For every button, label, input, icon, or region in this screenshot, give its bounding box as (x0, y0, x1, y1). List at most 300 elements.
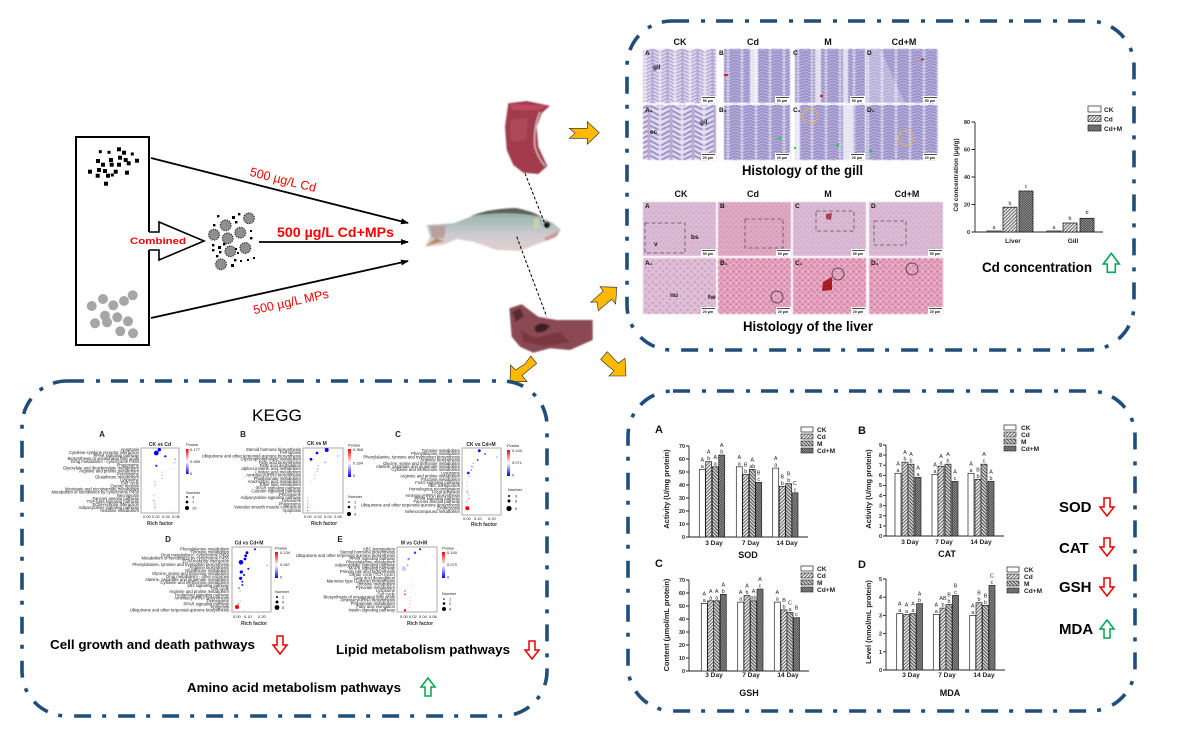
panel border (628, 391, 1135, 711)
dot plot D: Cd vs Cd+M: Cell cycle (211, 586, 230, 591)
dot plot E: M vs Cd+M: MAPK signaling pathway (349, 566, 396, 571)
bar chart B: CAT: b (946, 459, 950, 465)
icon: microplastic beads (87, 290, 138, 338)
bar chart C: GSH: a (776, 597, 779, 603)
dot plot C: CK vs Cd+M: 3 (515, 494, 518, 498)
dot plot C: CK vs Cd+M: 0.20 (488, 516, 497, 521)
micrographs: gill: A₁ (645, 107, 653, 114)
label: CAT: CAT (1059, 540, 1089, 557)
dot plot E: M vs Cd+M: ABC transporters (363, 546, 395, 552)
micrographs: gill: 20 μm (777, 156, 787, 160)
bar chart D: MDA: c (991, 580, 994, 586)
bar chart D: MDA: M (1024, 581, 1030, 588)
panel border (22, 381, 547, 716)
arrow: MPs to fish (151, 261, 408, 318)
dot plot C: CK vs Cd+M: 6 (515, 498, 518, 504)
bar chart C: GSH: 30 (679, 630, 685, 636)
bar chart B: CAT: 3 (879, 504, 882, 510)
dot plot E: M vs Cd+M: 0.04 (419, 614, 428, 619)
micrographs: gill: D₁ (867, 107, 875, 114)
dot plot C: CK vs Cd+M: Aminoacyl-tRNA biosynthesis (405, 493, 460, 498)
bar chart B: CAT: 5 (879, 483, 882, 489)
micrographs: gill: C₁ (793, 107, 801, 114)
dot plot C: CK vs Cd+M: Glycine, serine and threonine metabolism (383, 461, 461, 466)
bar chart C: GSH (655, 558, 836, 698)
bar chart: Cd concentration: Liver (1005, 238, 1021, 245)
dot plot B: CK vs M: 0.00 (304, 514, 313, 519)
bar chart B: CAT: c (954, 476, 957, 482)
micrographs: liver: 50 μm (778, 252, 788, 256)
dot plot D: Cd vs Cd+M: p53 signaling pathway (188, 583, 230, 588)
micrographs: gill: 50 μm (925, 99, 935, 103)
bar chart C: GSH: 10 (679, 656, 685, 662)
bar chart D: MDA: 3 Day (902, 672, 920, 679)
dot plot D: Cd vs Cd+M: Arginine and proline metabolism (169, 589, 230, 594)
dot plot B: CK vs M: Number (348, 494, 363, 499)
bar chart A: SOD: 50 (679, 470, 685, 476)
dot plot B: CK vs M: Vascular smooth muscle contraction (234, 505, 302, 510)
label: MDA: MDA (1059, 621, 1093, 638)
bar chart: Cd concentration: CK (1104, 107, 1114, 114)
dot plot B: CK vs M: 0 (353, 473, 356, 478)
panel: histology and Cd concentration (627, 21, 1134, 350)
bar chart A: SOD: B (744, 463, 748, 469)
bar chart: Cd concentration: Cd concentration (μg/g) (953, 138, 960, 212)
bar chart B: CAT: 7 Day (935, 539, 953, 546)
dot plot A: CK vs Cd: Pvalue (186, 442, 199, 447)
micrographs: liver: A₁ (645, 260, 653, 267)
micrographs: liver: C (795, 203, 800, 210)
dot plot C: CK vs Cd+M: Endocytosis (437, 506, 460, 511)
bar chart C: GSH: C (655, 558, 663, 570)
dot plot B: CK vs M: Steroid hormone biosynthesis (246, 447, 301, 452)
dot plot B: CK vs M: Aminoacyl-tRNA biosynthesis (246, 473, 301, 478)
label: 500 ug/L MPs: 500 µg/L MPs (252, 287, 330, 317)
dot plot E: M vs Cd+M: Adipocytokine signaling pathway (334, 562, 396, 568)
bar chart: Cd concentration (953, 106, 1123, 245)
dot plot C: CK vs Cd+M (361, 430, 523, 528)
dot plot D: Cd vs Cd+M: 0.00 (233, 614, 242, 619)
dot plot A: CK vs Cd: Phagosome (117, 462, 140, 467)
dot plot B: CK vs M: Fatty acid degradation (260, 463, 302, 468)
bar chart D: MDA: 3 (879, 614, 882, 620)
bar chart C: GSH: 40 (679, 617, 685, 623)
label: cell growth and death pathways: Cell growth and death pathways (50, 638, 255, 652)
dot plot A: CK vs Cd: Cell cycle (121, 481, 140, 486)
dot plot B: CK vs M: Phosphonate metabolism (254, 476, 302, 481)
dot plot A: CK vs Cd: Number (186, 490, 201, 495)
dot plot C: CK vs Cd+M: Pvalue (507, 443, 520, 448)
dot plot E: M vs Cd+M: Primary bile acid biosynthesis (340, 569, 395, 574)
bar chart C: GSH: M (817, 580, 823, 587)
dot plot E: M vs Cd+M: 0 (447, 574, 450, 580)
bar chart D: MDA: 4 (879, 595, 882, 601)
bar chart D: MDA: A (911, 602, 915, 608)
bar chart C: GSH: Cd+M (817, 587, 836, 594)
dot plot E: M vs Cd+M: Tyrosine metabolism (357, 582, 396, 587)
dot plot A: CK vs Cd: Glyoxylate and dicarboxylate metabolism (63, 465, 140, 470)
dot plot B: CK vs M: Rich factor (311, 521, 337, 527)
arrow: liver to KEGG (510, 356, 537, 382)
arrow: lipid down (525, 641, 539, 659)
dot plot D: Cd vs Cd+M: Cd vs Cd+M (235, 540, 263, 546)
dot plot E: M vs Cd+M: 0.070 (447, 562, 458, 567)
dot plot E: M vs Cd+M: Fatty acid degradation (354, 575, 396, 580)
dot plot C: CK vs Cd+M: Focal adhesion (432, 490, 461, 495)
bar chart C: GSH: 20 (679, 643, 685, 649)
bar chart A: SOD: c (794, 487, 797, 493)
label: combined: Combined (130, 236, 186, 247)
arrow: CAT down (1100, 538, 1114, 556)
bar chart C: GSH: 0 (682, 669, 685, 675)
bar chart B: CAT: M (1021, 439, 1027, 446)
bar chart C: GSH: A (745, 584, 749, 590)
bar chart D: MDA: Cd (1024, 574, 1033, 581)
bar chart D: MDA: A (905, 602, 908, 608)
micrographs: gill: 20 μm (703, 156, 713, 160)
dot plot A: CK vs Cd: Adipocytokine signaling pathway (78, 505, 140, 510)
bar chart C: GSH: 3 Day (705, 672, 723, 679)
dot plot A: CK vs Cd: Arginine and proline metabolism (79, 468, 140, 473)
bar chart D: MDA: Cd+M (1024, 588, 1043, 595)
heading: histology of the gill: Histology of the gill (742, 163, 863, 178)
bar chart A: SOD: b (707, 456, 710, 462)
dot plot E: M vs Cd+M: 0.02 (409, 614, 418, 619)
dot plot A: CK vs Cd: 0.177 (190, 447, 201, 452)
dot plot E: M vs Cd+M: Cell cycle (377, 591, 396, 596)
micrographs: gill: B₁ (719, 107, 727, 114)
dot plot B: CK vs M: B (240, 430, 246, 439)
bar chart C: GSH: b (782, 604, 786, 610)
dot plot D: Cd vs Cd+M: Pvalue (275, 546, 288, 550)
bar chart B: CAT: a (934, 469, 936, 475)
bar chart B: CAT: 8 (879, 453, 882, 459)
bar chart D: MDA: B (977, 591, 981, 597)
micrographs: liver: D₁ (871, 260, 879, 267)
bar chart B: CAT: A (946, 452, 950, 458)
dot plot D: Cd vs Cd+M: Ubiquinone and other terpenoid-quinone biosynthesis (130, 608, 229, 612)
dot plot C: CK vs Cd+M: Homologous recombination (409, 486, 461, 491)
dot plot C: CK vs Cd+M: 0.071 (512, 460, 523, 465)
bar chart A: SOD: a (738, 461, 741, 467)
icon: combined particles (209, 213, 255, 270)
bar chart D: MDA: 5 (879, 577, 882, 583)
dot plot A: CK vs Cd: Glutathione metabolism (95, 474, 140, 479)
column headings: gill: Cd (747, 37, 759, 47)
panel: antioxidant biomarkers (628, 391, 1135, 711)
bar chart C: GSH: B (795, 606, 798, 612)
dot plot B: CK vs M: 0.184 (353, 460, 364, 466)
arrow: cell growth down (273, 636, 287, 654)
micrographs: gill: 50 μm (777, 99, 787, 103)
bar chart B: CAT: B (976, 467, 980, 473)
dot plot C: CK vs Cd+M: Phenylalanine metabolism (411, 451, 461, 456)
dot plot E: M vs Cd+M: Pvalue (442, 546, 455, 550)
dot plot D: Cd vs Cd+M: Rich factor (241, 621, 267, 627)
bar chart A: SOD: C (793, 481, 797, 487)
micrographs: liver: 50 μm (703, 252, 713, 256)
dot plot E: M vs Cd+M: Ubiquinone and other terpenoid-quinone biosynthesis (296, 553, 395, 558)
bar chart B: CAT: 3 Day (901, 539, 919, 546)
label: 500 ug/L Cd: 500 µg/L Cd (248, 165, 318, 195)
bar chart A: SOD: Cd (817, 434, 826, 441)
arrow: GSH down (1100, 578, 1114, 596)
bar chart B: CAT: 6 (879, 473, 882, 479)
dot plot B: CK vs M: 0.02 (314, 514, 323, 519)
micrographs: liver: C₁ (795, 260, 803, 267)
panel border (627, 21, 1134, 350)
dot plot B: CK vs M: Glycerophospholipid metabolism (240, 457, 301, 462)
bar chart D: MDA (858, 559, 1043, 698)
dot plot C: CK vs Cd+M: Number (508, 487, 523, 492)
dot plot B: CK vs M: Fatty acid biosynthesis (259, 460, 301, 465)
arrow: amino acid up (421, 678, 435, 696)
bar chart B: CAT: b (904, 457, 906, 463)
micrographs: liver: 20 μm (703, 310, 713, 314)
dot plot D: Cd vs Cd+M: PPAR signaling pathway (183, 601, 230, 606)
bar chart A: SOD: Activity (U/mg protein) (662, 449, 671, 529)
bar chart D: MDA: MDA (940, 688, 961, 698)
bar chart B: CAT: 9 (879, 443, 882, 449)
dot plot C: CK vs Cd+M: Cysteine and methionine metabolism (391, 467, 461, 472)
dot plot B: CK vs M: Calcium signaling pathway (251, 489, 302, 494)
dot plot C: CK vs Cd+M: FoxO signaling pathway (415, 480, 461, 485)
dot plot A: CK vs Cd: CK vs Cd (149, 442, 171, 448)
dot plot B: CK vs M: Ether lipid metabolism (260, 482, 302, 487)
bar chart A: SOD: A (720, 443, 724, 449)
dot plot C: CK vs Cd+M: Alanine, aspartate and glutamate metabolism (376, 464, 460, 469)
bar chart: Cd concentration: Cd+M (1104, 126, 1123, 133)
bar chart C: GSH: A (775, 590, 779, 596)
bar chart C: GSH: B (782, 598, 786, 604)
arrow: gill to histology (569, 122, 599, 144)
bar chart C: GSH: a (703, 598, 706, 604)
dot plot A: CK vs Cd: Cytokine-cytokine receptor interaction (69, 450, 140, 455)
micrographs: liver: 20 μm (778, 310, 788, 314)
dot plot B: CK vs M: Phagosome (279, 501, 302, 506)
dot plot D: Cd vs Cd+M: Peroxisome (207, 598, 230, 603)
micrographs: liver: he (708, 294, 716, 301)
micrographs: gill: B (719, 50, 724, 57)
dot plot A: CK vs Cd: 10 (192, 506, 197, 510)
dot plot E: M vs Cd+M: 0.00 (400, 614, 409, 619)
bar chart D: MDA: A (898, 602, 902, 608)
bar chart A: SOD: B (787, 472, 791, 478)
bar chart B: CAT: CK (1021, 425, 1031, 432)
micrographs: gill (643, 49, 938, 160)
micrographs: gill: ec (650, 129, 658, 136)
micrographs: liver: 20 μm (853, 310, 863, 314)
panel: KEGG enrichment (22, 381, 547, 716)
bar chart C: GSH: c (795, 612, 798, 618)
bar chart D: MDA: C (990, 573, 994, 579)
micrographs: liver: B (720, 203, 725, 210)
dot plot D: Cd vs Cd+M: Hedgehog signaling pathway (175, 592, 230, 597)
dot plot A: CK vs Cd: ECM-receptor interaction (92, 502, 140, 507)
dot plot C: CK vs Cd+M: 0.00 (463, 516, 472, 521)
bar chart B: CAT: CAT (938, 549, 956, 559)
arrow: liver to biomarkers (601, 352, 626, 376)
dot plot E: M vs Cd+M: PPAR signaling pathway (349, 556, 396, 561)
dot plot C: CK vs Cd+M: Tyrosine metabolism (422, 448, 460, 453)
dot plot E: M vs Cd+M: Citrate cycle (TCA cycle) (349, 572, 396, 577)
bar chart A: SOD: 14 Day (776, 540, 798, 547)
bar chart C: GSH: A (715, 589, 719, 595)
dot plot D: Cd vs Cd+M: Phenylalanine metabolism (180, 546, 229, 552)
dot plot E: M vs Cd+M: Lysosome (376, 588, 396, 593)
bar chart A: SOD: A (700, 457, 704, 463)
micrographs: gill: D (867, 50, 872, 57)
bar chart B: CAT: A (953, 469, 957, 475)
dot plot C: CK vs Cd+M: C (395, 430, 401, 439)
column headings: liver: Cd+M (895, 189, 919, 199)
bar chart A: SOD: SOD (738, 550, 758, 560)
bar chart B: CAT: Cd (1021, 432, 1030, 439)
bar chart: Cd concentration: a (1052, 225, 1056, 231)
bar chart D: MDA: 0 (879, 668, 882, 674)
micrographs: liver: nu (670, 292, 678, 299)
bar chart A: SOD: 30 (679, 496, 685, 502)
bar chart C: GSH: 14 Day (777, 672, 799, 679)
bar chart D: MDA: A (934, 602, 938, 608)
micrographs: liver: 50 μm (930, 252, 940, 256)
dot plot E: M vs Cd+M: Fatty acid elongation (356, 604, 396, 609)
dot plot C: CK vs Cd+M: CK vs Cd+M (466, 442, 496, 448)
dot plot A: CK vs Cd: Peroxisome (117, 471, 140, 476)
micrographs: gill: 50 μm (703, 99, 713, 103)
dot plot D: Cd vs Cd+M (130, 535, 291, 627)
bar chart B: CAT: 0 (879, 534, 882, 540)
bar chart A: SOD: B (780, 474, 784, 480)
dot plot D: Cd vs Cd+M: Apoptosis (211, 604, 229, 609)
bar chart A: SOD: 60 (679, 457, 685, 463)
dot plot E: M vs Cd+M: Propanoate metabolism (351, 601, 396, 606)
dot plot E: M vs Cd+M: 4 (449, 606, 452, 612)
dot plot A: CK vs Cd: 0 (190, 471, 193, 476)
bar chart C: GSH: 70 (679, 578, 685, 584)
column headings: liver: M (824, 189, 832, 199)
dot plot E: M vs Cd+M: Biosynthesis of unsaturated fatty acids (324, 594, 395, 600)
dot plot A: CK vs Cd: 7 (192, 500, 195, 504)
dot plot B: CK vs M: Ferroptosis (280, 450, 301, 455)
bar chart A: SOD: 0 (682, 535, 685, 541)
dot plot B: CK vs M: CK vs M (307, 441, 327, 447)
micrographs: liver: D (871, 203, 876, 210)
bar chart A: SOD: B (757, 470, 761, 476)
column headings: gill (674, 37, 916, 47)
label: Cd concentration: Cd concentration (982, 259, 1092, 275)
bar chart B: CAT: a (916, 472, 920, 478)
column headings: gill: Cd+M (892, 37, 916, 47)
dot plot D: Cd vs Cd+M: 0.134 (280, 550, 291, 555)
bar chart B: CAT: a (896, 468, 900, 474)
arrow: Cd to fish (151, 158, 408, 223)
illustration: gill tissue (505, 101, 550, 174)
arrow: Cd up (1103, 253, 1119, 272)
dot plot D: Cd vs Cd+M: Glutathione metabolism (185, 568, 230, 573)
column headings: liver: Cd (747, 189, 759, 199)
dot plot A: CK vs Cd: Nicotinate and nicotinamide metabolism (65, 487, 139, 492)
bar chart D: MDA: b (942, 603, 944, 609)
bar chart A: SOD: Cd+M (817, 448, 836, 455)
bar chart C: GSH: 7 Day (742, 672, 760, 679)
bar chart D: MDA: b (948, 599, 950, 605)
bar chart: Cd concentration: c (1025, 184, 1028, 190)
label: lipid metabolism pathways: Lipid metabolism pathways (336, 643, 510, 657)
micrographs: gill: A (645, 50, 650, 57)
bar chart C: GSH: A (721, 582, 725, 588)
bar chart A: SOD: A (750, 457, 754, 463)
bar chart B: CAT: A (909, 452, 913, 458)
dot plot A: CK vs Cd: 0.02 (152, 514, 161, 519)
bar chart B: CAT: A (916, 465, 920, 471)
bar chart C: GSH: A (709, 589, 713, 595)
dot plot C: CK vs Cd+M: Fanconi anemia pathway (413, 499, 461, 504)
dot plot B: CK vs M (202, 430, 364, 527)
illustration: liver tissue (509, 304, 593, 353)
bar chart C: GSH: c (759, 584, 762, 590)
dot plot B: CK vs M: Adipocytokine signaling pathway (240, 495, 302, 500)
dot plot B: CK vs M: Apoptosis (283, 508, 301, 513)
bar chart A: SOD: A (737, 455, 741, 461)
dot plot A: CK vs Cd (51, 430, 201, 527)
dot plot E: M vs Cd+M: Mannose type O-glycan biosynthesis (327, 578, 395, 584)
arrow: SOD down (1100, 498, 1114, 516)
dot plot D: Cd vs Cd+M: Glycine, serine and threonine metabolism (152, 571, 230, 576)
arrow: Cd+MPs to fish (259, 241, 408, 243)
dot plot C: CK vs Cd+M: 0.140 (512, 448, 523, 453)
label: 500 ug/L Cd+MPs: 500 µg/L Cd+MPs (277, 225, 394, 240)
icon: cadmium particles (88, 147, 139, 186)
bar chart D: MDA: CK (1024, 567, 1034, 574)
label: amino acid metabolism pathways: Amino acid metabolism pathways (187, 681, 401, 695)
bar chart A: SOD: M (817, 441, 823, 448)
bar chart B: CAT: c (983, 459, 986, 465)
bar chart D: MDA: b (918, 598, 921, 604)
bar chart C: GSH: A (702, 591, 706, 597)
bar chart B: CAT: A (989, 469, 993, 475)
bar chart: Cd concentration: a (992, 225, 996, 231)
bar chart C: GSH: CK (817, 566, 827, 573)
bar chart B: CAT: 14 Day (970, 539, 992, 546)
dot plot D: Cd vs Cd+M: Phenylalanine, tyrosine and tryptophan biosynthesis (132, 562, 229, 567)
dot plot A: CK vs Cd: 0.089 (190, 459, 201, 464)
bar chart: Cd concentration: 20 (964, 202, 970, 208)
dot plot C: CK vs Cd+M: ABC transporters (428, 483, 460, 488)
dot plot D: Cd vs Cd+M: 4 (282, 600, 285, 604)
bar chart D: MDA: b (984, 600, 987, 606)
bar chart B: CAT: A (982, 452, 986, 458)
dot plot A: CK vs Cd: A (99, 430, 105, 439)
bar chart A: SOD: c (757, 477, 760, 483)
bar chart C: GSH: A (739, 590, 743, 596)
dashed line: fish to liver (517, 237, 547, 317)
dot plot E: M vs Cd+M: 2 (449, 601, 452, 606)
micrographs: gill: 20 μm (925, 156, 935, 160)
bar chart D: MDA: D (858, 559, 866, 571)
bar chart A: SOD: 20 (679, 509, 685, 515)
bar chart A: SOD: 10 (679, 522, 685, 528)
dot plot B: CK vs M: 1 (354, 500, 357, 504)
bar chart B: CAT: 4 (879, 494, 882, 500)
bar chart C: GSH: 50 (679, 604, 685, 610)
dot plot D: Cd vs Cd+M: 0 (280, 574, 283, 580)
bar chart B: CAT: A (933, 462, 937, 468)
bar chart B: CAT: A (903, 450, 907, 456)
dot plot D: Cd vs Cd+M: Cysteine and methionine metabolism (160, 580, 230, 585)
dot plot A: CK vs Cd: Histidine metabolism (100, 508, 140, 513)
micrographs: gill: gil (700, 119, 708, 126)
